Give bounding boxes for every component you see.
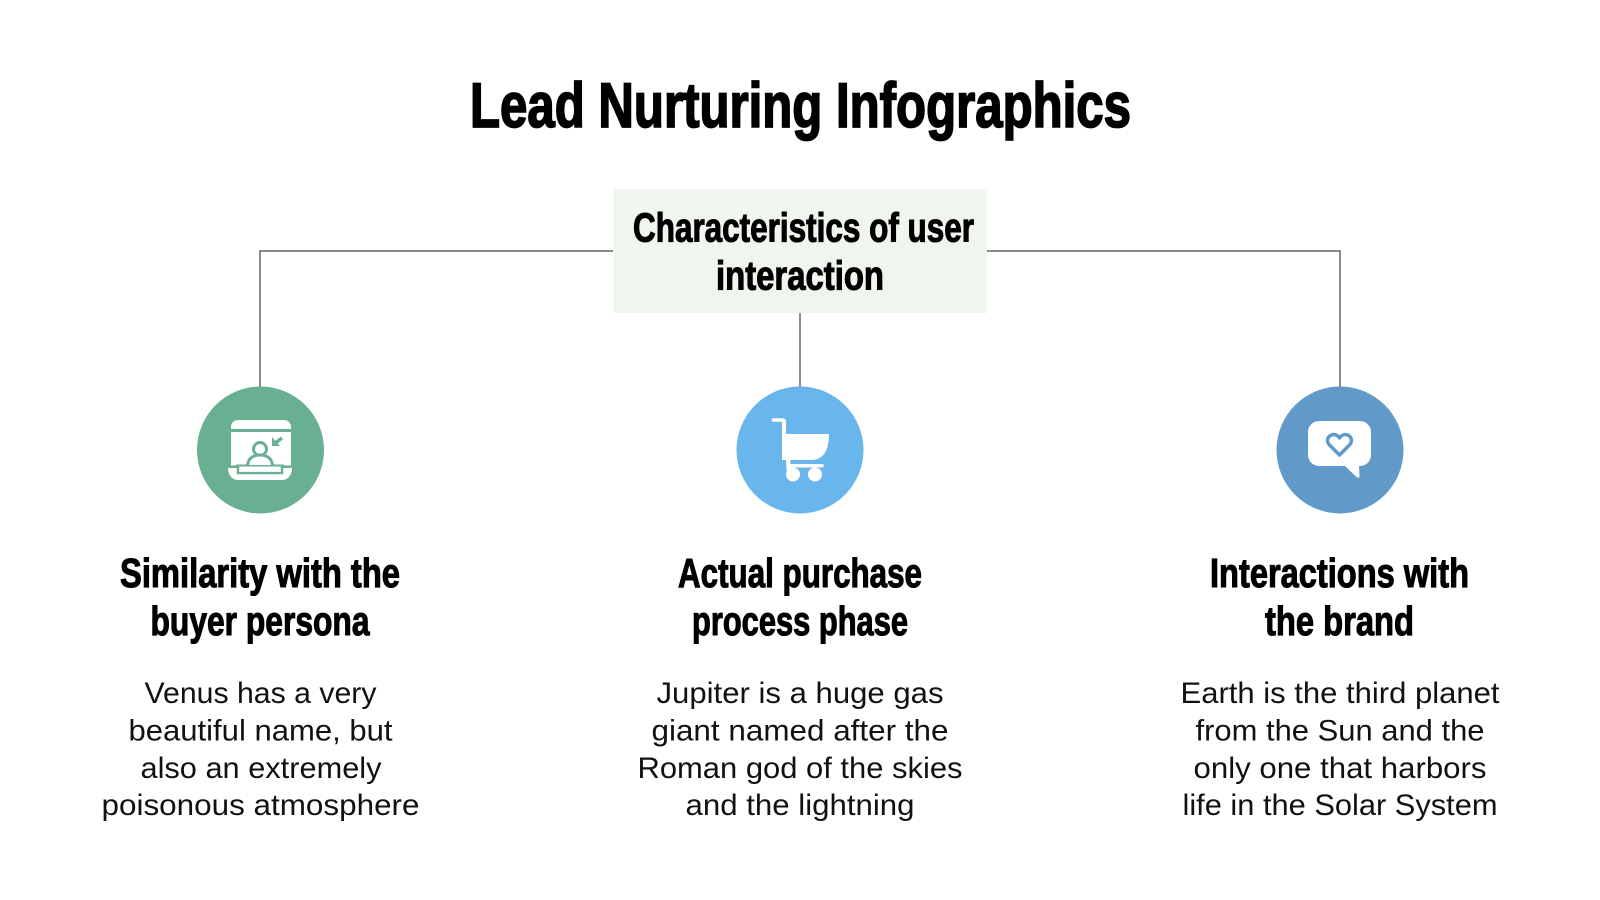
body text: life in the Solar System <box>1182 789 1498 822</box>
body text: and the lightning <box>686 789 914 822</box>
central box: characteristics of user interaction <box>614 189 987 313</box>
body text: from the Sun and the <box>1196 714 1484 748</box>
body text: giant named after the <box>652 714 948 748</box>
connector lines <box>260 251 1340 387</box>
column 2: actual purchase process phase <box>638 386 962 822</box>
body text: poisonous atmosphere <box>102 789 420 822</box>
central box: characteristics of user interaction: Characteristics of user <box>633 204 974 250</box>
body text <box>638 677 962 822</box>
body text: Earth is the third planet <box>1180 677 1500 710</box>
body text: only one that harbors <box>1194 752 1486 785</box>
heading: Actual purchase <box>678 550 922 596</box>
title: Lead Nurturing Infographics <box>470 71 1131 141</box>
heading: buyer persona <box>150 598 370 644</box>
body text: Jupiter is a huge gas <box>656 677 944 710</box>
body text: beautiful name, but <box>128 714 393 748</box>
heading: the brand <box>1265 598 1414 644</box>
body text <box>1180 677 1500 822</box>
icon: laptop with user profile <box>197 386 324 514</box>
body text <box>102 677 420 822</box>
body text: also an extremely <box>140 752 382 785</box>
heading: Interactions with <box>1210 550 1469 596</box>
central box: characteristics of user interaction: interaction <box>716 252 884 298</box>
heading: process phase <box>692 598 908 644</box>
heading <box>120 550 400 644</box>
heading: Similarity with the <box>120 550 400 596</box>
body text: Roman god of the skies <box>638 752 962 785</box>
icon: shopping cart <box>736 386 864 514</box>
body text: Venus has a very <box>144 677 376 710</box>
heading <box>1210 550 1469 644</box>
heading <box>678 550 922 644</box>
icon: speech bubble with heart <box>1276 386 1404 514</box>
column 1: similarity with the buyer persona <box>102 386 420 822</box>
column 3: interactions with the brand <box>1180 386 1500 822</box>
